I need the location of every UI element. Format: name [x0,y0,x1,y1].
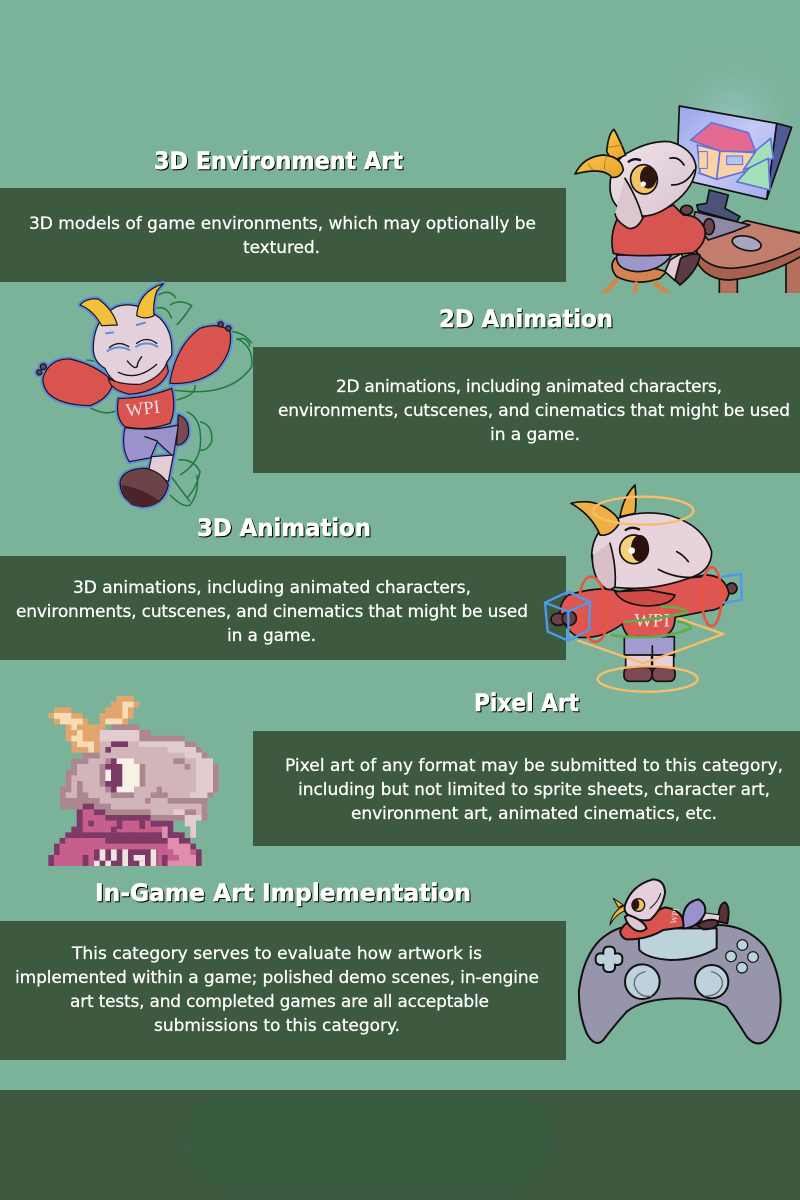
footer band [0,1090,800,1200]
description: Pixel Art: including but not limited to sprite sheets, character art, [298,780,770,800]
heading: 2D Animation: 2D Animation [439,305,613,333]
illustration: goat at computer [574,80,800,293]
description: 3D Environment Art: textured. [243,238,320,258]
heading: Pixel Art: Pixel Art [474,689,579,717]
footer faded logo shape [189,1094,551,1186]
heading: In-Game Art Implementation: In-Game Art Implementation [95,879,471,907]
description: 2D Animation: environments, cutscenes, and cinematics that might be used [278,401,790,421]
description: In-Game Art Implementation: implemented within a game; polished demo scenes, in-engine [15,968,539,988]
description: 3D Animation: in a game. [227,626,316,646]
panel: 2D Animation [253,305,800,473]
description: 2D Animation: 2D animations, including animated characters, [336,377,722,397]
panel: In-Game Art Implementation [0,879,566,1060]
illustration: goat on game controller [579,879,781,1043]
description: 3D Environment Art [29,214,536,258]
description: 3D Animation [16,578,528,646]
panel: 3D Animation [0,514,566,660]
illustration: pixel art goat [48,696,219,866]
description: In-Game Art Implementation [15,944,539,1036]
illustration: goat 3D rig [545,485,742,692]
description: Pixel Art [285,756,783,824]
description: Pixel Art: environment art, animated cinematics, etc. [351,804,717,824]
description: In-Game Art Implementation: art tests, and completed games are all acceptable [70,992,489,1012]
description: 2D Animation [278,377,790,445]
panel: 3D Environment Art [0,147,566,282]
description: 3D Animation: environments, cutscenes, and cinematics that might be used [16,602,528,622]
panel: Pixel Art [253,689,800,846]
illustration: jumping goat animation sketch [37,284,252,507]
illustration: jumping goat animation sketch: WPI [125,397,161,422]
illustration: goat 3D rig: WPI [634,611,670,632]
description: 3D Animation: 3D animations, including animated characters, [73,578,471,598]
description: Pixel Art: Pixel art of any format may be submitted to this category, [285,756,783,776]
description: In-Game Art Implementation: This category serves to evaluate how artwork is [71,944,482,964]
illustration: goat on game controller: WPI [668,907,681,925]
heading: 3D Environment Art: 3D Environment Art [154,147,403,175]
description: 3D Environment Art: 3D models of game environments, which may optionally be [29,214,536,234]
description: 2D Animation: in a game. [490,425,580,445]
description: In-Game Art Implementation: submissions to this category. [154,1016,400,1036]
heading: 3D Animation: 3D Animation [197,514,371,542]
